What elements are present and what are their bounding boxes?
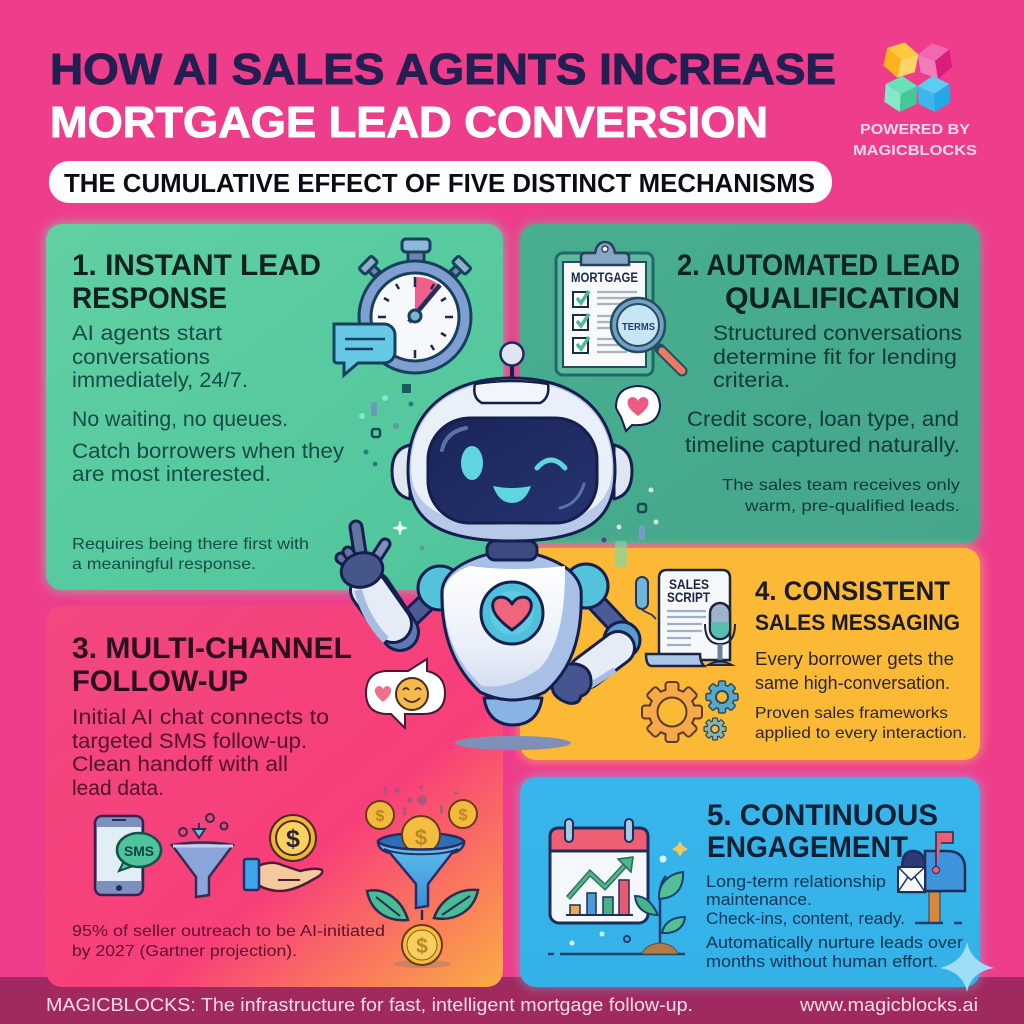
- footer bar: [0, 977, 1024, 1024]
- icon: sales script with microphone: [636, 570, 735, 666]
- heading 5: ENGAGEMENT: [707, 831, 908, 864]
- body text 4: same high-conversation.: [755, 673, 950, 693]
- note text 2: The sales team receives only: [722, 477, 960, 494]
- robot body: [442, 549, 581, 700]
- heading 4: [755, 576, 960, 635]
- heading 5: [707, 799, 938, 864]
- robot neck: [487, 541, 537, 560]
- panel 4: consistent sales messaging: [518, 546, 982, 762]
- logo: powered by magicblocks: MAGICBLOCKS: [853, 142, 977, 159]
- body text 3: [72, 706, 329, 800]
- heading 2: [677, 249, 960, 315]
- subtitle pill: THE CUMULATIVE EFFECT OF FIVE DISTINCT MECHANISMS: [64, 168, 815, 198]
- heading 4: SALES MESSAGING: [755, 610, 960, 635]
- body text 1: [72, 322, 345, 486]
- note text 4: [755, 705, 967, 742]
- robot ears: [392, 445, 632, 499]
- body text 5: maintenance.: [706, 890, 812, 909]
- footer bar: www.magicblocks.ai: [799, 995, 978, 1015]
- icon: coin above hand: [244, 815, 322, 891]
- note text 4: applied to every interaction.: [755, 725, 967, 742]
- body text 1: are most interested.: [72, 463, 271, 486]
- title: [50, 45, 836, 147]
- body text 2: [685, 322, 962, 457]
- note text 3: by 2027 (Gartner projection).: [72, 943, 297, 960]
- icon: phone with sms bubble: [95, 816, 161, 895]
- robot right arm on hip: [552, 598, 640, 703]
- icon: stopwatch with chat bubble: [334, 239, 471, 375]
- body text 1: AI agents start: [72, 322, 222, 345]
- panel 2: automated lead qualification: [518, 222, 982, 546]
- body text 2: Structured conversations: [713, 322, 962, 345]
- note text 2: warm, pre-qualified leads.: [744, 498, 960, 515]
- icon: small funnel: [172, 814, 233, 897]
- body text 3: Initial AI chat connects to: [72, 706, 329, 729]
- robot foot: [484, 698, 542, 725]
- body text 3: lead data.: [72, 777, 164, 800]
- icon: mailbox with envelope: [898, 832, 965, 923]
- robot chest badge with heart: [481, 582, 543, 644]
- heading 4: 4. CONSISTENT: [755, 576, 950, 606]
- body text 5: Long-term relationship: [706, 872, 886, 891]
- heading 5: 5. CONTINUOUS: [707, 799, 938, 832]
- note text 4: Proven sales frameworks: [755, 705, 948, 722]
- robot forehead plate: [474, 381, 548, 403]
- heading 3: FOLLOW-UP: [72, 665, 248, 698]
- note text 1: [72, 536, 309, 573]
- robot raised hand: [337, 527, 387, 592]
- icon: smiling speech bubble: [366, 659, 445, 728]
- body text 3: Clean handoff with all: [72, 753, 288, 776]
- robot floor shadow: [455, 736, 571, 750]
- robot shoulders: [418, 564, 608, 610]
- body text 1: conversations: [72, 346, 210, 369]
- body text 5: Automatically nurture leads over: [706, 933, 963, 952]
- note text 1: Requires being there first with: [72, 536, 309, 553]
- body text 1: immediately, 24/7.: [72, 369, 248, 392]
- robot body highlight: [444, 566, 565, 687]
- icon: calendar with growth chart: [550, 819, 648, 923]
- icon: mortgage clipboard with magnifier: [556, 242, 682, 375]
- robot mascot: [337, 342, 640, 750]
- note text 3: [72, 923, 385, 960]
- icon: mortgage clipboard with magnifier: MORTGAGE: [571, 270, 638, 285]
- note text 2: [722, 477, 960, 515]
- body text 5: months without human effort.: [706, 952, 938, 971]
- sparkle decoration: [940, 942, 994, 992]
- body text 2: criteria.: [713, 369, 790, 392]
- subtitle pill: [49, 161, 832, 203]
- panel 5: continuous engagement: [518, 775, 982, 989]
- heading 1: RESPONSE: [72, 282, 227, 315]
- heading 1: 1. INSTANT LEAD: [72, 249, 321, 282]
- body text 3: targeted SMS follow-up.: [72, 730, 307, 753]
- body text 4: [755, 649, 954, 693]
- icon: big funnel with coins and leaves: $: [376, 808, 385, 825]
- logo: powered by magicblocks: [853, 39, 977, 159]
- icon: coin above hand: $: [286, 825, 300, 853]
- heading 2: QUALIFICATION: [725, 282, 960, 315]
- body text 1: No waiting, no queues.: [72, 408, 288, 431]
- body text 2: timeline captured naturally.: [685, 434, 960, 457]
- body text 5: [706, 872, 963, 971]
- logo: powered by magicblocks: POWERED BY: [860, 121, 970, 138]
- body text 2: Credit score, loan type, and: [687, 408, 959, 431]
- panel 1: instant lead response: [44, 222, 505, 592]
- note text 1: a meaningful response.: [72, 556, 256, 573]
- icon: big funnel with coins and leaves: $: [415, 825, 427, 850]
- robot antenna: [500, 342, 524, 378]
- body text 2: determine fit for lending: [713, 346, 957, 369]
- robot head: [408, 378, 615, 541]
- icon: heart speech bubble: [616, 386, 660, 431]
- heading 3: [72, 632, 352, 698]
- title: MORTGAGE LEAD CONVERSION: [50, 98, 768, 147]
- icon: sales script with microphone: SALES: [669, 576, 709, 592]
- icon: gears: [642, 681, 738, 742]
- panel 3: multi-channel follow-up: [46, 605, 503, 987]
- icon: big funnel with coins and leaves: $: [416, 935, 428, 958]
- icon: phone with sms bubble: SMS: [124, 843, 154, 859]
- icon: growing plant: [548, 841, 688, 954]
- title: HOW AI SALES AGENTS INCREASE: [50, 45, 836, 94]
- icon: big funnel with coins and leaves: $: [459, 807, 468, 824]
- icon: mortgage clipboard with magnifier: TERMS: [622, 321, 655, 333]
- heading 2: 2. AUTOMATED LEAD: [677, 249, 960, 282]
- robot visor face: [428, 418, 597, 523]
- footer bar: MAGICBLOCKS: The infrastructure for fast, intelligent mortgage follow-up.: [46, 995, 693, 1015]
- robot left arm pointing up: [337, 527, 432, 640]
- robot head highlight: [411, 381, 612, 525]
- body text 1: Catch borrowers when they: [72, 440, 345, 463]
- floating pixels near robot: [359, 384, 658, 567]
- heading 3: 3. MULTI-CHANNEL: [72, 632, 352, 665]
- icon: big funnel with coins and leaves: [366, 785, 478, 968]
- note text 3: 95% of seller outreach to be AI-initiated: [72, 923, 385, 940]
- icon: sales script with microphone: SCRIPT: [667, 589, 710, 605]
- body text 5: Check-ins, content, ready.: [706, 909, 905, 928]
- heading 1: [72, 249, 321, 315]
- body text 4: Every borrower gets the: [755, 649, 954, 669]
